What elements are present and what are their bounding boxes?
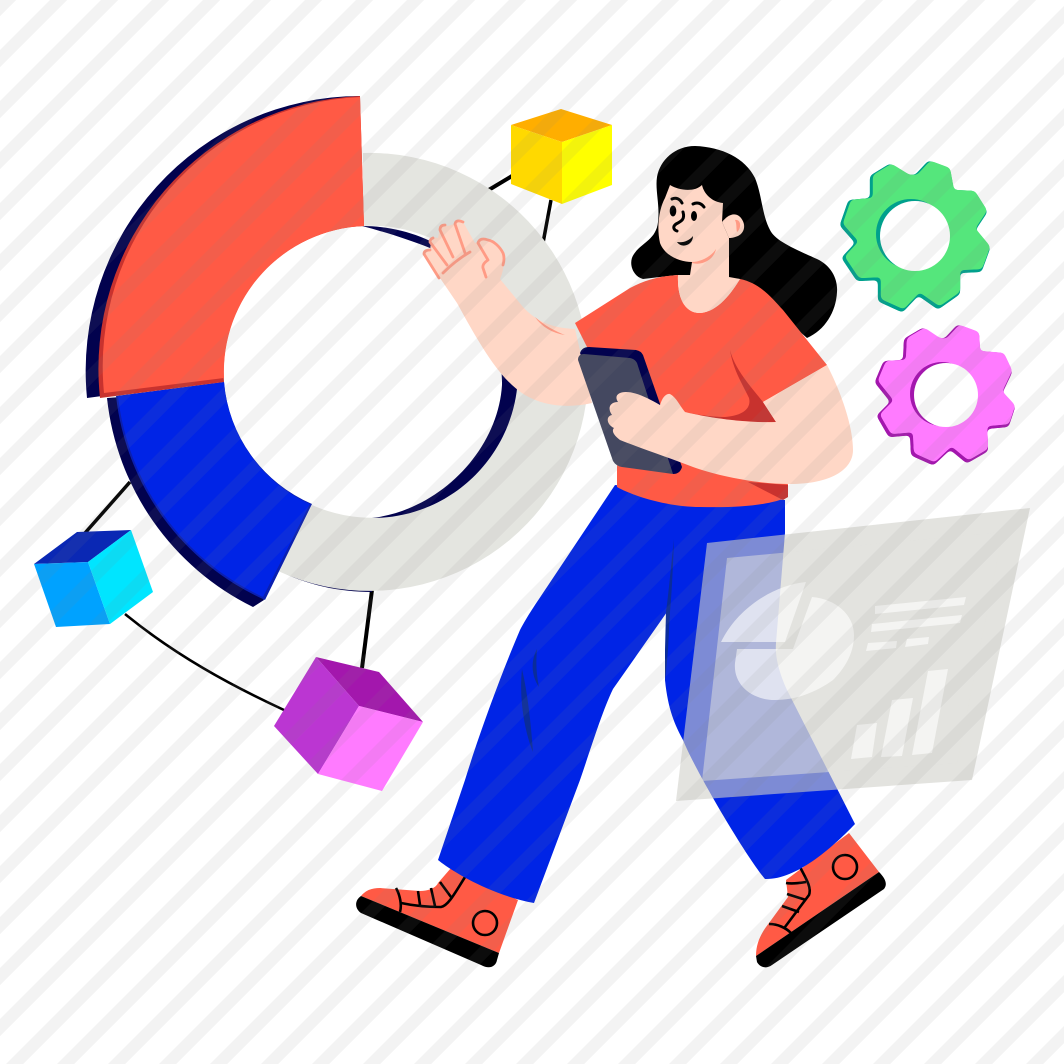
hair (631, 146, 837, 338)
smile (677, 236, 693, 246)
icon: pink gear (877, 326, 1014, 463)
blue donut segment (116, 382, 312, 600)
donut chart (86, 96, 588, 607)
trouser fold lines (521, 539, 674, 752)
eyes (670, 206, 676, 216)
icon: yellow cube (511, 109, 612, 204)
navy shadow behind donut (86, 96, 372, 607)
forearm and hand on tablet (608, 365, 853, 484)
neck shadow (692, 249, 716, 264)
panel bar chart (851, 669, 948, 759)
t-shirt (575, 275, 827, 507)
icon: purple cube (274, 657, 423, 791)
panel text lines (866, 597, 966, 651)
panel inner screen (702, 532, 1003, 781)
icon: green gear (842, 162, 990, 310)
left shoe (356, 868, 518, 967)
navy inner crescent (362, 226, 518, 518)
shirt fold shadow (683, 350, 776, 422)
red donut segment (98, 96, 364, 398)
face and neck (658, 185, 744, 313)
tablet (578, 347, 682, 474)
right shoe (756, 833, 886, 967)
trousers (438, 485, 855, 903)
grey donut segment (278, 153, 588, 591)
finger lines (424, 221, 504, 278)
eyebrows and nose (672, 198, 704, 231)
connector lines (85, 176, 551, 710)
glass dashboard panel (676, 508, 1030, 801)
raised arm and hand (424, 221, 592, 406)
ear (722, 214, 744, 238)
panel pie chart (721, 582, 854, 700)
icon: blue cube (34, 530, 153, 627)
